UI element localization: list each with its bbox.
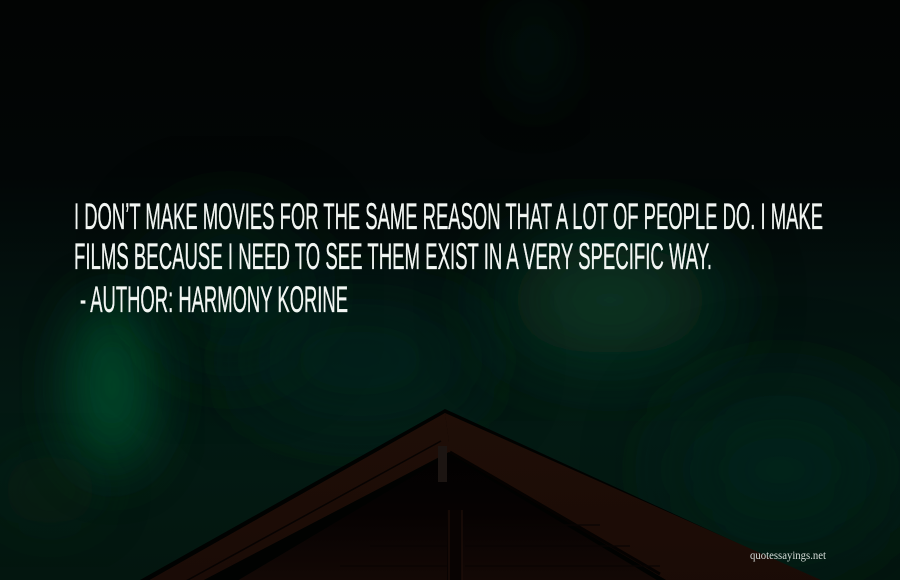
quote text [74, 196, 823, 277]
poster scene: - AUTHOR: HARMONY KORINE [80, 279, 348, 320]
wall plank lines [340, 525, 660, 566]
left roof board [146, 413, 449, 580]
right roof board [445, 413, 830, 580]
illustration: wooden house roof [130, 409, 840, 580]
centre wall trim [447, 510, 462, 580]
gable wall [205, 455, 690, 580]
gable post [438, 446, 447, 482]
left board groove [186, 441, 441, 580]
roof outer shadow [130, 409, 840, 580]
right board shadow line [450, 452, 660, 574]
watermark: quotessayings.net [750, 548, 827, 562]
